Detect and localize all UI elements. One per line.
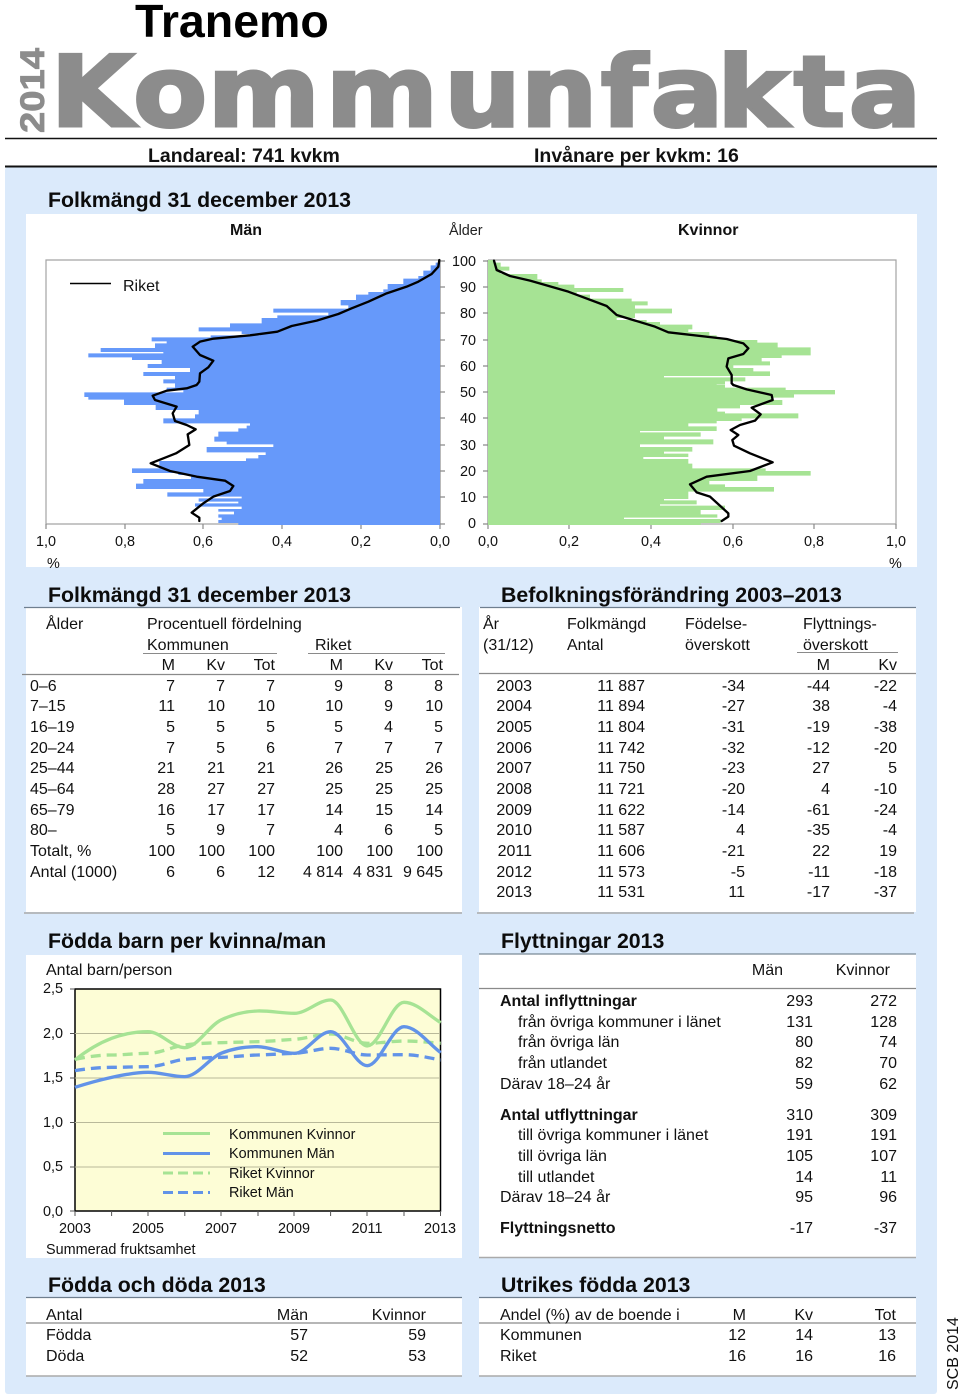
table rows: 7–15 [30, 698, 66, 715]
percent axis labels: % [47, 556, 60, 572]
change table header: Flyttnings- [803, 616, 877, 633]
panel: foreign born: 16 [728, 1348, 746, 1365]
in-migration rows: 62 [879, 1076, 897, 1093]
panel: births and deaths: Kvinnor [372, 1307, 427, 1324]
heading: migration: Flyttningar 2013 [501, 929, 664, 953]
table rows: 25 [375, 781, 393, 798]
table rows: 100 [316, 843, 343, 860]
in-migration rows: 272 [870, 993, 897, 1010]
change table rows: -5 [731, 864, 745, 881]
legend [163, 1127, 356, 1201]
table rows: 10 [425, 698, 443, 715]
table rows: 65–79 [30, 802, 75, 819]
age axis labels: 70 [460, 333, 476, 349]
table rows: 5 [166, 822, 175, 839]
change table header: överskott [803, 637, 868, 654]
table header: M [162, 657, 175, 674]
change table rows: 11 606 [597, 843, 645, 860]
in-migration rows: 80 [795, 1034, 813, 1051]
panel: foreign born: 13 [878, 1327, 896, 1344]
heading: population change: Befolkningsförändring 2003–2013 [501, 583, 842, 607]
table rows: 100 [366, 843, 393, 860]
change table rows: -38 [874, 719, 897, 736]
table rows: 16 [157, 802, 175, 819]
fertility y axis labels: 1,5 [43, 1070, 63, 1086]
change table rows: -18 [874, 864, 897, 881]
in-migration rows: Därav 18–24 år [500, 1075, 611, 1093]
out-migration rows: 95 [795, 1189, 813, 1206]
heading: fertility: Födda barn per kvinna/man [48, 929, 326, 953]
change table rows [496, 678, 897, 901]
panel: foreign born: M [733, 1307, 746, 1324]
out-migration rows: 107 [870, 1148, 897, 1165]
table rows: 100 [198, 843, 225, 860]
table rows: 21 [257, 760, 275, 777]
legend: Riket Kvinnor [229, 1166, 315, 1182]
in-migration rows [500, 993, 897, 1093]
table rows: 7 [166, 678, 175, 695]
fertility x axis labels: 2003 [59, 1221, 91, 1237]
table rows: 9 645 [403, 864, 443, 881]
table header: Tot [254, 657, 276, 674]
fertility x axis labels: 2011 [352, 1221, 382, 1237]
table rows: 7 [434, 740, 443, 757]
table rows: 25 [325, 781, 343, 798]
table header: Tot [422, 657, 444, 674]
out-migration rows: till övriga län [518, 1148, 607, 1165]
table rows: 17 [257, 802, 275, 819]
change table rows: 11 531 [597, 884, 645, 901]
in-migration rows: från övriga kommuner i länet [518, 1013, 721, 1031]
panel: population change table [477, 607, 916, 913]
panel: foreign born: 12 [728, 1327, 746, 1344]
change table rows: 38 [812, 698, 830, 715]
heading: births and deaths: Födda och döda 2013 [48, 1273, 266, 1297]
table rows: 9 [384, 698, 393, 715]
table rows: 80– [30, 822, 57, 839]
fertility x axis labels: 2007 [205, 1221, 237, 1237]
table rows: 5 [166, 719, 175, 736]
legend: Riket line [70, 278, 160, 295]
panel: migration table [479, 954, 916, 1258]
panel: foreign born [479, 1298, 916, 1376]
in-migration rows: 70 [879, 1055, 897, 1072]
change table rows: 11 894 [597, 698, 645, 715]
change table header: (31/12) [483, 637, 534, 654]
in-migration rows: 293 [786, 993, 813, 1010]
table rows: 6 [266, 740, 275, 757]
table rows: 12 [257, 864, 275, 881]
in-migration rows: 128 [870, 1014, 897, 1031]
table rows [30, 678, 443, 881]
table rows: 8 [384, 678, 393, 695]
change table header: År [483, 614, 500, 633]
percent axis labels: 1,0 [36, 534, 56, 550]
panel: foreign born: Kommunen [500, 1327, 582, 1344]
percent axis labels: 0,2 [351, 534, 371, 550]
age axis labels: 50 [460, 385, 476, 401]
age axis labels: 0 [468, 516, 476, 532]
table rows: 10 [207, 698, 225, 715]
women bars upper [488, 260, 811, 385]
table rows: 7 [334, 740, 343, 757]
panel: foreign born: Kv [794, 1307, 813, 1324]
in-migration rows: 59 [795, 1076, 813, 1093]
fertility y axis labels: 0,0 [43, 1204, 63, 1220]
chart frame and axes [46, 260, 896, 529]
table rows: Antal (1000) [30, 864, 117, 881]
change table rows: -35 [807, 822, 830, 839]
change table rows: 2007 [496, 760, 532, 777]
table header [46, 614, 444, 674]
fertility x axis labels: 2005 [132, 1221, 164, 1237]
men bars upper [88, 260, 440, 385]
fertility y axis labels: 0,5 [43, 1159, 63, 1175]
change table rows: -19 [807, 719, 830, 736]
pyramid column labels [230, 222, 738, 239]
age axis labels: 10 [460, 490, 476, 506]
table rows: 4 [334, 822, 343, 839]
table header: Ålder [46, 614, 84, 633]
legend: Kommunen Män [229, 1146, 335, 1162]
change table rows: 4 [736, 822, 745, 839]
table rows: 5 [334, 719, 343, 736]
table rows: 11 [158, 698, 175, 715]
fertility lines [75, 1000, 441, 1087]
change table rows: 11 573 [597, 864, 645, 881]
out-migration rows: 105 [786, 1148, 813, 1165]
age axis labels: 40 [460, 411, 476, 427]
panel: foreign born: Riket [500, 1348, 537, 1365]
legend: Kommunen Kvinnor [229, 1127, 356, 1143]
panel: births and deaths: 53 [408, 1348, 426, 1365]
change table rows: 22 [812, 843, 830, 860]
panel: foreign born: 14 [795, 1327, 813, 1344]
change table header: M [817, 657, 830, 674]
change table header: Folkmängd [567, 616, 646, 633]
table rows: 27 [207, 781, 225, 798]
table rows: 4 [384, 719, 393, 736]
table rows: 5 [266, 719, 275, 736]
percent axis labels [36, 534, 906, 572]
change table rows: 11 804 [597, 719, 645, 736]
fertility x axis labels [59, 1221, 456, 1237]
table rows: 4 831 [353, 864, 393, 881]
change table rows: 11 887 [597, 678, 645, 695]
percent axis labels: 0,0 [478, 534, 498, 550]
change table rows: -37 [874, 884, 897, 901]
table rows: 5 [216, 740, 225, 757]
table header: Kv [206, 657, 225, 674]
change table rows: -34 [722, 678, 745, 695]
change table rows: -14 [722, 802, 745, 819]
change table rows: -17 [807, 884, 830, 901]
out-migration rows: 11 [880, 1169, 897, 1186]
logo: Kommunfakta: Kommunfakta [50, 36, 921, 150]
out-migration rows: 191 [786, 1127, 813, 1144]
panel: births and deaths [26, 1298, 462, 1376]
change table rows: 11 742 [597, 740, 645, 757]
table rows: 45–64 [30, 781, 75, 798]
panel: births and deaths: 59 [408, 1327, 426, 1344]
in-migration rows: från utlandet [518, 1054, 608, 1072]
table rows: 100 [416, 843, 443, 860]
change table rows: 2010 [496, 822, 532, 839]
change table rows: 2003 [496, 678, 532, 695]
panel: fertility chart [26, 955, 462, 1258]
age axis labels: 20 [460, 464, 476, 480]
net migration row: -17 [790, 1220, 813, 1237]
table header: Kv [374, 657, 393, 674]
out-migration rows: Antal utflyttningar [500, 1107, 638, 1124]
age axis labels: 80 [460, 306, 476, 322]
change table header [483, 614, 897, 674]
out-migration rows: Därav 18–24 år [500, 1188, 611, 1206]
table rows: 25–44 [30, 760, 75, 777]
change table rows: -22 [874, 678, 897, 695]
in-migration rows: 82 [795, 1055, 813, 1072]
change table rows: -61 [807, 802, 830, 819]
table rows: 28 [157, 781, 175, 798]
panel: foreign born: Tot [875, 1307, 897, 1324]
change table header: Födelse- [685, 616, 747, 633]
out-migration rows: 96 [879, 1189, 897, 1206]
migration header: Män [752, 962, 783, 979]
percent axis labels: 0,8 [115, 534, 135, 550]
change table rows: 27 [812, 760, 830, 777]
table rows: 7 [216, 678, 225, 695]
panel: births and deaths: Antal [46, 1307, 82, 1324]
change table rows: 2004 [496, 698, 532, 715]
change table rows: 2009 [496, 802, 532, 819]
out-migration rows [500, 1107, 897, 1206]
panel: births and deaths: 52 [290, 1348, 308, 1365]
fertility x axis labels: 2009 [278, 1221, 310, 1237]
out-migration rows: 14 [795, 1169, 813, 1186]
percent axis labels: 0,4 [641, 534, 661, 550]
change table rows: -44 [807, 678, 830, 695]
table rows: 8 [434, 678, 443, 695]
table rows: 26 [425, 760, 443, 777]
change table rows: 2008 [496, 781, 532, 798]
legend: Riket Män [229, 1185, 294, 1201]
table rows: 15 [375, 802, 393, 819]
table rows: 16–19 [30, 719, 75, 736]
table rows: 25 [375, 760, 393, 777]
table rows: 17 [207, 802, 225, 819]
fertility y axis labels [43, 981, 63, 1220]
percent axis labels: 1,0 [886, 534, 906, 550]
table header: M [330, 657, 343, 674]
change table rows: -12 [807, 740, 830, 757]
in-migration rows: från övriga län [518, 1033, 619, 1051]
table rows: 100 [248, 843, 275, 860]
change table header: Kv [878, 657, 897, 674]
change table rows: -20 [874, 740, 897, 757]
percent axis labels: 0,4 [272, 534, 292, 550]
panel: births and deaths: Födda [46, 1327, 91, 1344]
change table rows: -20 [722, 781, 745, 798]
change table rows: -24 [874, 802, 897, 819]
panel: fertility chart: Summerad fruktsamhet [46, 1242, 196, 1258]
table rows: 26 [325, 760, 343, 777]
change table rows: 11 587 [597, 822, 645, 839]
table rows: Totalt, % [30, 843, 91, 860]
panel: foreign born: 16 [878, 1348, 896, 1365]
out-migration rows: 309 [870, 1107, 897, 1124]
percent axis labels: % [889, 556, 902, 572]
table rows: 5 [216, 719, 225, 736]
in-migration rows: 74 [879, 1034, 897, 1051]
table rows: 27 [257, 781, 275, 798]
net migration row: -37 [874, 1220, 897, 1237]
panel: births and deaths: Män [277, 1307, 308, 1324]
women bars lower [488, 385, 835, 525]
out-migration rows: till utlandet [518, 1169, 595, 1186]
logo: Kommunfakta: 2014 [14, 48, 52, 133]
table rows: 0–6 [30, 678, 57, 695]
change table rows: 11 750 [597, 760, 645, 777]
panel: population pyramid [26, 214, 917, 572]
out-migration rows: till övriga kommuner i länet [518, 1127, 709, 1144]
table header: Riket [315, 637, 352, 654]
change table rows: 4 [821, 781, 830, 798]
change table rows: 2012 [496, 864, 532, 881]
table rows: 10 [257, 698, 275, 715]
key facts: Landareal: 741 kvkm [148, 145, 340, 167]
pyramid column labels: Ålder [449, 222, 483, 239]
table rows: 6 [216, 864, 225, 881]
out-migration rows: 191 [870, 1127, 897, 1144]
fertility y axis labels: 1,0 [43, 1115, 63, 1131]
table rows: 5 [434, 719, 443, 736]
pyramid column labels: Män [230, 222, 262, 239]
percent axis labels: 0,6 [723, 534, 743, 550]
change table rows: -21 [722, 843, 745, 860]
plot area [75, 989, 440, 1211]
change table rows: 11 [728, 884, 745, 901]
change table rows: -4 [883, 698, 897, 715]
table rows: 20–24 [30, 740, 75, 757]
change table rows: -11 [808, 864, 830, 881]
change table rows: 2005 [496, 719, 532, 736]
change table rows: -31 [722, 719, 745, 736]
out-migration rows: 310 [786, 1107, 813, 1124]
panel: fertility chart: Antal barn/person [46, 962, 172, 979]
table rows: 9 [216, 822, 225, 839]
table rows: 25 [425, 781, 443, 798]
change table rows: 2013 [496, 884, 532, 901]
table rows: 14 [325, 802, 343, 819]
change table rows: -32 [722, 740, 745, 757]
panel: births and deaths: 57 [290, 1327, 308, 1344]
table rows: 9 [334, 678, 343, 695]
table header: Kommunen [147, 637, 229, 654]
change table rows: 11 721 [597, 781, 645, 798]
fertility y axis labels: 2,5 [43, 981, 63, 997]
change table rows: 2011 [498, 843, 532, 860]
change table rows: 2006 [496, 740, 532, 757]
table rows: 5 [434, 822, 443, 839]
change table rows: 11 622 [597, 802, 645, 819]
table rows: 10 [325, 698, 343, 715]
heading: foreign born: Utrikes födda 2013 [501, 1273, 691, 1297]
fertility x axis labels: 2013 [424, 1221, 456, 1237]
change table header: överskott [685, 637, 750, 654]
panel: population table [22, 607, 462, 913]
change table header: Antal [567, 637, 603, 654]
age axis labels [452, 254, 476, 532]
age axis labels: 90 [460, 280, 476, 296]
percent axis labels: 0,0 [430, 534, 450, 550]
table rows: 4 814 [303, 864, 343, 881]
age axis labels: 30 [460, 438, 476, 454]
change table rows: -10 [874, 781, 897, 798]
change table rows: 5 [888, 760, 897, 777]
table rows: 7 [266, 678, 275, 695]
table rows: 7 [266, 822, 275, 839]
age axis labels: 100 [452, 254, 476, 270]
heading: population table: Folkmängd 31 december 2013 [48, 583, 351, 607]
change table rows: -4 [883, 822, 897, 839]
table rows: 21 [157, 760, 175, 777]
in-migration rows: Antal inflyttningar [500, 993, 637, 1010]
table rows: 21 [207, 760, 225, 777]
table rows: 7 [384, 740, 393, 757]
key facts: Invånare per kvkm: 16 [534, 144, 739, 167]
panel: foreign born: Andel (%) av de boende i [500, 1307, 680, 1324]
percent axis labels: 0,8 [804, 534, 824, 550]
change table rows: -27 [722, 698, 745, 715]
legend: Riket line: Riket [123, 278, 160, 295]
table header: Procentuell fördelning [147, 616, 302, 633]
net migration row [500, 1220, 897, 1237]
table rows: 100 [148, 843, 175, 860]
in-migration rows: 131 [786, 1014, 813, 1031]
age axis labels: 60 [460, 359, 476, 375]
table rows: 6 [384, 822, 393, 839]
percent axis labels: 0,6 [193, 534, 213, 550]
change table rows: -23 [722, 760, 745, 777]
net migration row: Flyttningsnetto [500, 1220, 616, 1237]
percent axis labels: 0,2 [559, 534, 579, 550]
pyramid column labels: Kvinnor [678, 222, 738, 239]
panel: foreign born: 16 [795, 1348, 813, 1365]
key facts [148, 144, 739, 167]
change table rows: 19 [879, 843, 897, 860]
migration header: Kvinnor [836, 962, 891, 979]
men bars lower [84, 385, 440, 525]
table rows: 6 [166, 864, 175, 881]
panel: births and deaths: Döda [46, 1348, 84, 1365]
fertility y axis labels: 2,0 [43, 1026, 63, 1042]
table rows: 14 [425, 802, 443, 819]
heading: population pyramid: Folkmängd 31 december 2013 [48, 188, 351, 212]
table rows: 7 [166, 740, 175, 757]
